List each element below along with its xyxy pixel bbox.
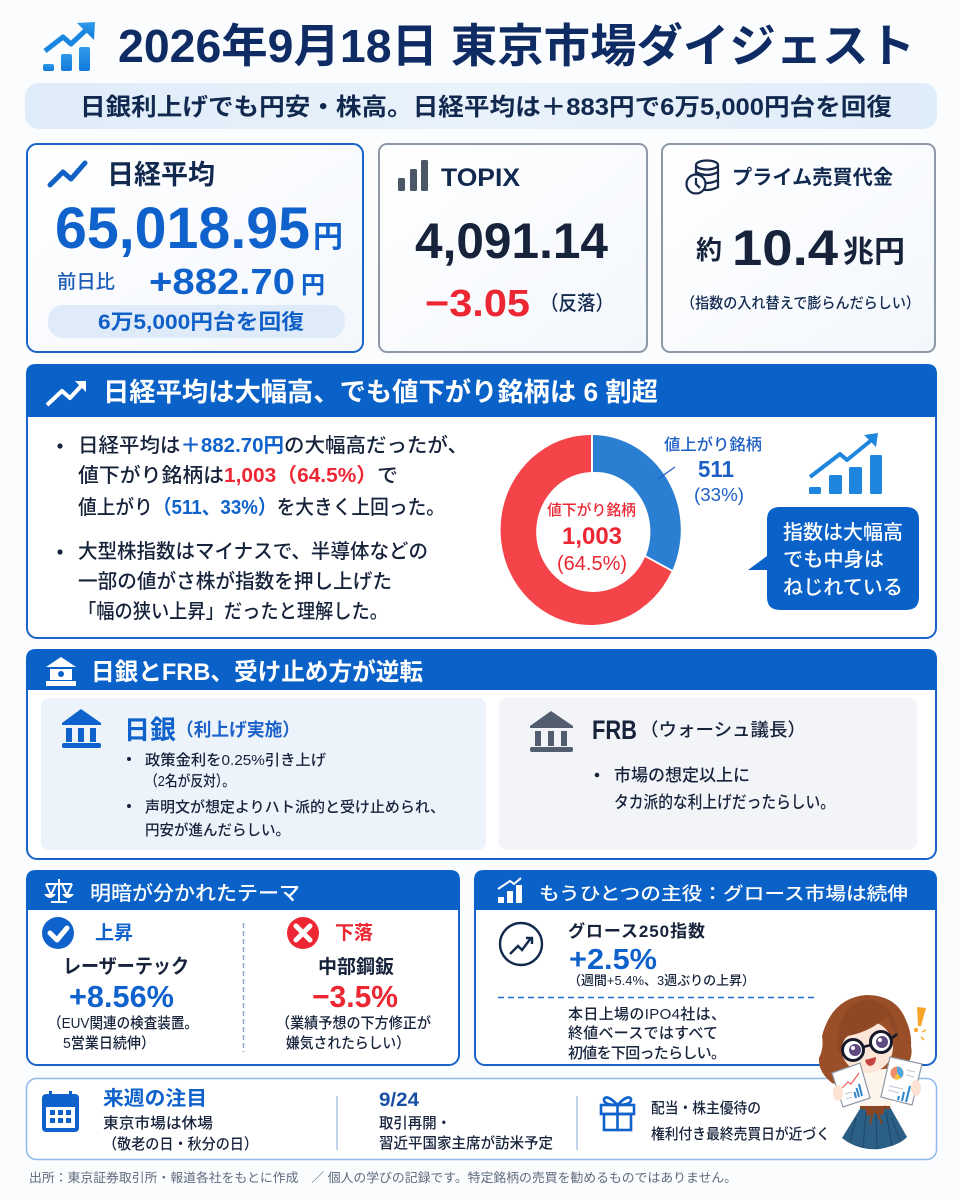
panel: breadth section	[26, 364, 937, 638]
text block: bullets	[57, 434, 468, 623]
note: fell back: （反落）	[540, 292, 614, 315]
text block: IPO: 初値を下回ったらしい。	[568, 1045, 726, 1062]
heading bar	[474, 870, 937, 910]
text block: FRB bullets	[595, 766, 835, 812]
icon: cross	[287, 917, 319, 949]
donut chart: 1,003	[562, 523, 622, 550]
icon: gift	[601, 1097, 634, 1130]
note: 嫌気されたらしい）	[286, 1035, 410, 1052]
footer: source note: 出所：東京証券取引所・報道各社をもとに作成 ／ 個人の学びの記録です。特定銘柄の売買を勧めるものではありません。	[29, 1170, 737, 1185]
sub-panel: FRB	[499, 698, 917, 850]
callout	[748, 507, 919, 610]
donut chart: (64.5%)	[557, 553, 627, 575]
text: dividends: 配当・株主優待の	[651, 1100, 761, 1117]
value: 10.4: 10.4	[732, 220, 838, 276]
donut chart: 511	[698, 456, 734, 482]
panel: TOPIX	[379, 144, 647, 352]
text block: BOJ bullets: 円安が進んだらしい。	[145, 821, 290, 839]
text: 9/24: 9/24	[379, 1090, 419, 1111]
heading bar	[26, 364, 937, 417]
heading bar	[26, 649, 937, 690]
icon: bank building	[530, 711, 573, 752]
icon: circled trend	[500, 923, 542, 965]
pill: recovered 65,000	[48, 305, 345, 338]
text block: BOJ bullets: 声明文が想定よりハト派的と受け止められ、	[145, 798, 445, 816]
text block: bullets: 一部の値がさ株が指数を押し上げた	[78, 570, 392, 593]
column: rising theme	[42, 917, 198, 1052]
panel: contrasting themes	[26, 870, 460, 1065]
icon: exclamation mark	[914, 1007, 926, 1040]
text block: IPO: 終値ベースではすべて	[568, 1025, 718, 1042]
illustration: girl with glasses holding charts	[819, 995, 926, 1149]
heading bar	[26, 870, 460, 910]
sub-heading: chair: （ウォーシュ議長）	[640, 720, 806, 740]
heading: next week: 来週の注目	[103, 1087, 207, 1110]
face	[841, 1021, 893, 1073]
icon: trend line	[50, 163, 85, 185]
text block: bullets: 値上がり（511、33%）を大きく上回った。	[78, 496, 445, 519]
text block: BOJ bullets: （2名が反対）。	[145, 772, 235, 790]
panel: Prime trading value	[662, 144, 935, 352]
donut chart: 値上がり銘柄	[664, 435, 762, 454]
heading: Nikkei: 日経平均	[107, 160, 215, 190]
text: dividends	[651, 1100, 830, 1143]
chart paper right	[881, 1057, 922, 1105]
value: TOPIX change: −3.05	[425, 283, 530, 325]
panel: Growth market	[474, 870, 937, 1065]
icon: check	[42, 917, 74, 949]
text block: FRB bullets: 市場の想定以上に	[614, 766, 750, 785]
heading: FRB: FRB	[592, 715, 637, 745]
heading bar: 日銀とFRB、受け止め方が逆転	[91, 658, 423, 686]
text: 9/24: 習近平国家主席が訪米予定	[379, 1134, 553, 1152]
bangs	[838, 1000, 899, 1052]
icon: calendar	[42, 1091, 79, 1132]
callout: でも中身は	[783, 548, 884, 571]
value: TOPIX: 4,091.14	[415, 213, 608, 269]
donut chart: 値下がり銘柄	[547, 501, 636, 519]
column: falling theme	[276, 917, 431, 1052]
panel: next week	[26, 1078, 936, 1160]
text: 9/24: 取引再開・	[379, 1115, 451, 1132]
hair back	[819, 995, 912, 1084]
mouth	[865, 1057, 876, 1066]
heading: TOPIX: TOPIX	[441, 164, 520, 192]
label: falling: 下落	[335, 922, 373, 944]
text block: bullets: 「幅の狭い上昇」だったと理解した。	[78, 600, 388, 623]
heading: BOJ: 日銀	[124, 715, 176, 745]
skirt	[842, 1107, 907, 1149]
value: rise: +8.56%	[69, 979, 174, 1014]
text block: BOJ bullets: 政策金利を0.25%引き上げ	[145, 752, 326, 769]
text: market holiday	[103, 1114, 258, 1153]
note	[48, 1015, 198, 1052]
icon: bars	[398, 160, 428, 191]
note: （EUV関連の検査装置。	[48, 1015, 198, 1032]
stock name: 中部鋼鈑	[318, 956, 394, 978]
pill: recovered 65,000: 6万5,000円台を回復	[98, 311, 304, 334]
note: （業績予想の下方修正が	[276, 1014, 431, 1032]
panel: BOJ and FRB	[26, 649, 937, 859]
text block: BOJ bullets	[127, 752, 445, 839]
label: rising: 上昇	[95, 922, 133, 944]
text block: bullets: 値下がり銘柄は 1,003（64.5%） で	[78, 464, 398, 487]
sub-heading: rate hike: （利上げ実施）	[176, 720, 300, 740]
value: index level: 65,018.95	[55, 196, 310, 261]
icon: chart going up	[809, 433, 882, 494]
value: fall: −3.5%	[312, 979, 398, 1014]
donut chart: (33%)	[694, 485, 744, 505]
text block: bullets: 大型株指数はマイナスで、半導体などの	[78, 540, 428, 563]
icon: rising chart	[43, 22, 95, 71]
icon: bank building	[62, 709, 101, 748]
blouse	[858, 1068, 892, 1107]
text block: FRB bullets: タカ派的な利上げだったらしい。	[614, 793, 835, 812]
subtitle banner	[25, 83, 937, 129]
heading bar: 日経平均は大幅高、でも値下がり銘柄は 6 割超	[103, 377, 658, 407]
text block: bullets: 日経平均は＋882.70円の大幅高だったが、	[78, 434, 468, 457]
text: dividends: 権利付き最終売買日が近づく	[651, 1125, 830, 1143]
unit: trillion yen: 兆円	[843, 236, 905, 269]
note: weekly: （週間+5.4%、3週ぶりの上昇）	[568, 973, 755, 988]
text: 9/24	[379, 1090, 553, 1152]
note: index rebalance: （指数の入れ替えで膨らんだらしい）	[681, 294, 920, 312]
text: market holiday: 東京市場は休場	[103, 1114, 213, 1132]
sub-panel: BOJ	[41, 698, 486, 850]
title: 2026年9月18日 東京市場ダイジェスト	[118, 20, 915, 72]
heading bar: もうひとつの主役：グロース市場は続伸	[539, 884, 908, 904]
note: 5営業日続伸）	[63, 1034, 155, 1052]
unit: yen: 円	[313, 221, 343, 254]
text block: IPO	[568, 1006, 726, 1062]
heading: trading value: プライム売買代金	[732, 166, 893, 189]
unit: yen: 円	[301, 272, 325, 299]
callout: ねじれている	[783, 577, 903, 599]
text block: IPO: 本日上場のIPO4社は、	[568, 1006, 726, 1023]
callout: 指数は大幅高	[783, 521, 903, 544]
glasses	[842, 1032, 892, 1060]
panel: Nikkei average	[27, 144, 363, 352]
label: Growth 250: グロース250指数	[568, 921, 705, 941]
stock name: レーザーテック	[63, 955, 189, 978]
value: Growth 250: +2.5%	[569, 944, 657, 976]
subtitle banner: 日銀利上げでも円安・株高。日経平均は＋883円で6万5,000円台を回復	[80, 94, 892, 121]
chart paper left	[832, 1063, 870, 1107]
text: market holiday: （敬老の日・秋分の日）	[103, 1136, 258, 1153]
header: title with icon	[43, 20, 915, 72]
value: change: +882.70	[149, 261, 295, 302]
heading bar: 明暗が分かれたテーマ	[90, 882, 300, 905]
donut chart	[501, 435, 762, 625]
note	[276, 1014, 431, 1052]
hands	[833, 1080, 921, 1101]
value: about: 約	[696, 235, 722, 265]
icon: coins	[686, 160, 718, 194]
label: day on day: 前日比	[57, 271, 115, 293]
